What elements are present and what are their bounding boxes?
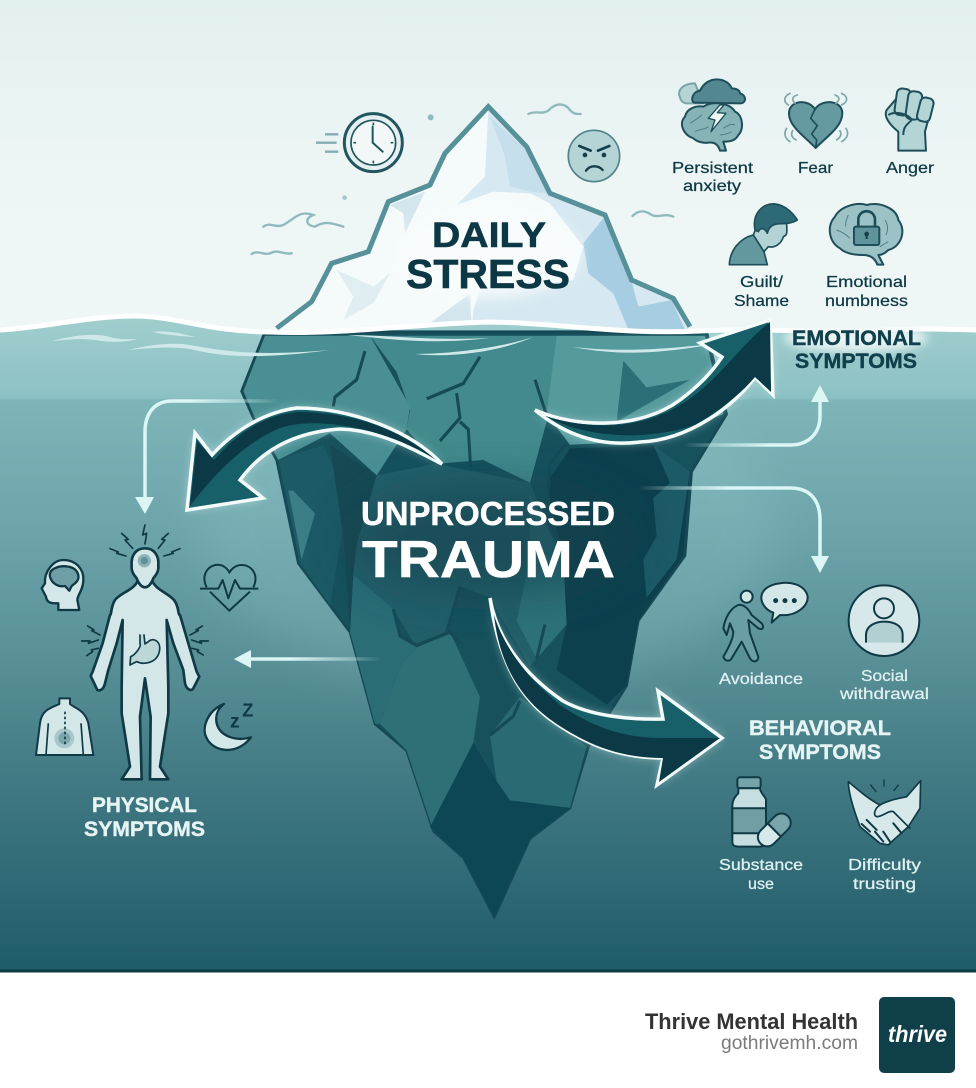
icon: broken heart (fear) bbox=[785, 93, 848, 148]
heading: emotional symptoms: EMOTIONAL bbox=[792, 327, 921, 350]
big arrow: to emotional symptoms bbox=[535, 320, 773, 443]
thin arrow: to physical symptoms from top bbox=[135, 401, 278, 514]
big arrow: to behavioral symptoms bbox=[490, 598, 722, 785]
icon: moon: z bbox=[230, 711, 240, 732]
label: avoidance: Avoidance bbox=[719, 671, 803, 688]
icon: bowed person (guilt) bbox=[729, 204, 797, 265]
label: emotional numbness: numbness bbox=[825, 293, 908, 310]
label: persistent anxiety: Persistent bbox=[672, 160, 754, 177]
title: daily stress bbox=[406, 216, 570, 297]
label: guilt/shame: Shame bbox=[734, 293, 789, 310]
label: substance use: Substance bbox=[719, 857, 803, 874]
label: persistent anxiety bbox=[672, 160, 754, 195]
icon: brain with storm (persistent anxiety) bbox=[679, 79, 745, 151]
label: anger: Anger bbox=[886, 160, 935, 177]
footer background bbox=[0, 970, 976, 1088]
heading: physical symptoms bbox=[84, 794, 205, 841]
water surface highlight bbox=[0, 316, 976, 356]
label: difficulty trusting: Difficulty bbox=[848, 857, 921, 874]
icon: heart with pulse bbox=[200, 565, 258, 611]
thin arrow: to behavioral symptoms bbox=[640, 488, 829, 573]
heading: behavioral symptoms: SYMPTOMS bbox=[759, 741, 881, 764]
water body bbox=[0, 316, 976, 971]
heading: emotional symptoms bbox=[792, 327, 921, 373]
icon: fist (anger) bbox=[886, 88, 935, 151]
icon: handshake bbox=[848, 780, 921, 845]
title: unprocessed trauma bbox=[361, 495, 615, 589]
iceberg above water bbox=[277, 107, 690, 333]
footer brand text bbox=[645, 1009, 858, 1054]
icon: bottle and pill bbox=[732, 777, 795, 850]
label: social withdrawal bbox=[839, 668, 929, 703]
label: guilt/shame: Guilt/ bbox=[740, 274, 784, 291]
heading: physical symptoms: PHYSICAL bbox=[92, 794, 197, 817]
label: difficulty trusting bbox=[848, 857, 921, 893]
label: substance use: use bbox=[748, 876, 774, 893]
icon: moon: Z bbox=[242, 700, 254, 721]
background sky bbox=[0, 0, 976, 335]
label: social withdrawal: Social bbox=[861, 668, 908, 685]
mist behind emotional heading bbox=[784, 324, 928, 352]
label: difficulty trusting: trusting bbox=[853, 876, 916, 893]
icon: locked brain (numbness) bbox=[830, 204, 902, 265]
heading: behavioral symptoms: BEHAVIORAL bbox=[749, 717, 891, 740]
title: daily stress: STRESS bbox=[406, 251, 570, 297]
heading: behavioral symptoms bbox=[749, 717, 891, 764]
thin arrow: to physical symptoms from center bbox=[234, 650, 380, 668]
icon: person in circle bbox=[849, 585, 919, 656]
heading: physical symptoms: SYMPTOMS bbox=[84, 818, 205, 841]
label: substance use bbox=[719, 857, 803, 893]
icon: angry face bbox=[568, 130, 620, 182]
big arrow: to physical symptoms bbox=[187, 408, 442, 510]
icon: head with brain bbox=[42, 560, 83, 610]
icon: back pain bbox=[36, 698, 93, 755]
label: emotional numbness: Emotional bbox=[826, 274, 907, 291]
title: unprocessed trauma: TRAUMA bbox=[362, 531, 615, 589]
label: emotional numbness bbox=[825, 274, 908, 310]
footer logo: thrive bbox=[888, 1021, 947, 1047]
icon: clock bbox=[316, 114, 402, 172]
footer brand text: Thrive Mental Health bbox=[645, 1009, 858, 1034]
heading: emotional symptoms: SYMPTOMS bbox=[795, 350, 917, 373]
decorative waves and dots bbox=[252, 104, 673, 254]
label: guilt/shame bbox=[734, 274, 789, 310]
light halo around iceberg bbox=[198, 370, 778, 690]
footer brand text: gothrivemh.com bbox=[721, 1033, 858, 1054]
icon: human body with symptoms bbox=[82, 525, 208, 779]
iceberg below water bbox=[242, 332, 727, 917]
dark halo behind trauma title bbox=[348, 485, 628, 595]
icon: moon bbox=[205, 700, 254, 750]
footer divider bbox=[0, 970, 976, 972]
label: persistent anxiety: anxiety bbox=[683, 178, 741, 195]
label: social withdrawal: withdrawal bbox=[839, 686, 929, 703]
label: fear: Fear bbox=[798, 160, 834, 177]
title: unprocessed trauma: UNPROCESSED bbox=[361, 495, 615, 532]
icon: walking person and speech bubble bbox=[723, 583, 808, 661]
thin arrow: to emotional symptoms bbox=[685, 385, 829, 445]
footer logo bbox=[879, 997, 955, 1073]
title: daily stress: DAILY bbox=[432, 216, 546, 255]
